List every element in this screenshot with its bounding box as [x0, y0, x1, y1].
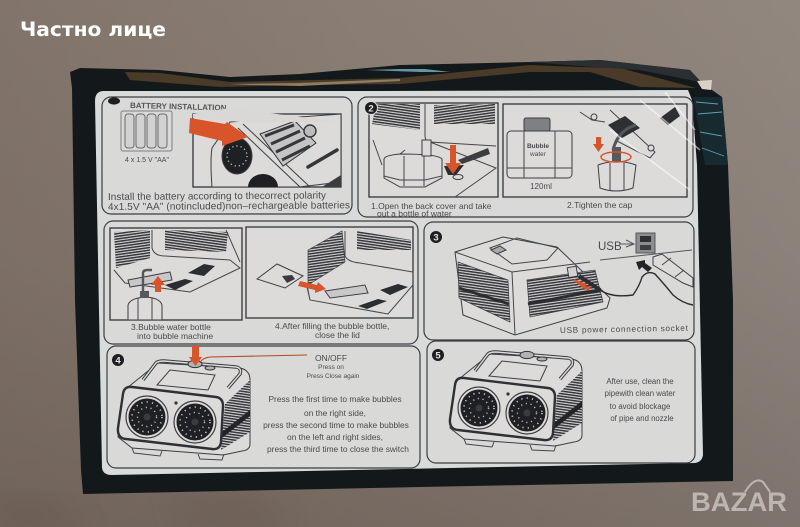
arrow: orange up: [151, 276, 165, 292]
panel 1: battery installation: [102, 97, 352, 214]
text: on/off instructions: press the second time to make bubbles: [263, 420, 409, 430]
label: USB socket: USB: [598, 241, 622, 253]
label: USB socket: [598, 233, 655, 253]
text: USB caption: USB power connection socket: [560, 324, 689, 335]
text: battery instructions: Install the battery according to thecorrect polarity: [108, 190, 326, 203]
text: step 1 caption: 1.Open the back cover and take: [371, 201, 492, 211]
text: step 1 caption: out a bottle of water: [377, 208, 452, 218]
text: step 4 caption: [275, 321, 389, 340]
illustration: battery compartment: [193, 108, 341, 187]
illustration: machine with USB cable: [455, 237, 693, 335]
text: step 4 caption: 4.After filling the bubble bottle,: [275, 321, 389, 331]
text: step 3 caption: [131, 322, 213, 341]
text: step 3 caption: into bubble machine: [137, 331, 213, 341]
icon: step number 5: 5: [435, 350, 441, 362]
illustration: tighten the cap: [580, 107, 680, 191]
text: cleaning instructions: of pipe and nozzle: [610, 414, 674, 423]
callout: orange line to on/off: [200, 355, 307, 363]
arrow: orange USB plug: [574, 279, 591, 291]
illustration: bubble water bottle: 120ml: [530, 182, 552, 191]
decorative plastic glare: [610, 92, 700, 190]
text: on/off label: [307, 353, 360, 380]
illustration: bubble water bottle: water: [529, 151, 547, 158]
illustration: USB plug: [653, 254, 693, 287]
illustration: bubble water bottle: Bubble: [527, 143, 549, 150]
text: on/off label: Press Close again: [307, 373, 360, 380]
illustration: bubble water bottle: [503, 104, 687, 197]
arrow: orange press down: [189, 346, 202, 366]
text: step 4 caption: close the lid: [315, 330, 360, 340]
icon: step number 1: [108, 97, 120, 105]
panel 5: on/off operation: [107, 346, 420, 468]
text: step 2 caption: 2.Tighten the cap: [567, 200, 633, 210]
teal plastic glare: [693, 97, 728, 165]
illustration: machine front: [118, 360, 250, 460]
torn brown flap: [125, 65, 696, 88]
illustration: machine front: [450, 351, 582, 451]
text: cleaning instructions: [605, 377, 676, 423]
text: step 3 caption: 3.Bubble water bottle: [131, 322, 211, 332]
panel 3: fitting the bottle: [104, 221, 418, 344]
icon: step number 4: [112, 354, 124, 366]
arrow: orange to lid: [298, 281, 326, 293]
icon: step number 3: [430, 231, 442, 244]
text: cleaning instructions: to avoid blockage: [610, 402, 670, 411]
icon: step number 4: 4: [115, 356, 121, 366]
arrow: orange down: [445, 145, 461, 174]
text: cleaning instructions: pipewith clean water: [605, 389, 676, 398]
text: on/off instructions: on the left and right sides,: [287, 432, 383, 442]
panel 2: bottle preparation: [358, 97, 693, 218]
illustration: open back cover: [369, 103, 498, 197]
instruction sheet: [95, 90, 703, 475]
text: on/off label: Press on: [318, 364, 344, 371]
label: battery spec: 4 x 1.5 V "AA": [125, 157, 169, 164]
illustration: closing the lid: [246, 227, 413, 318]
icon: step number 2: [364, 102, 378, 114]
icon: step number 3: 3: [433, 232, 439, 244]
text: on/off instructions: on the right side,: [304, 408, 366, 418]
icon: four AA batteries: [121, 111, 172, 151]
illustration: bottle into machine: [110, 228, 242, 320]
box: black packaging box: [70, 60, 733, 494]
text: step 1 caption: [371, 201, 492, 218]
text: on/off instructions: Press the first time to make bubbles: [268, 394, 402, 404]
text: on/off instructions: [263, 394, 409, 454]
text: on/off label: ON/OFF: [315, 353, 347, 363]
heading: battery installation: BATTERY INSTALLATION: [130, 101, 227, 113]
text: on/off instructions: press the third time to close the switch: [267, 444, 409, 454]
text: battery requirements: 4x1.5V "AA" (notincluded)non–rechargeable batteries: [108, 200, 350, 213]
text: cleaning instructions: After use, clean the: [606, 377, 674, 386]
icon: step number 2: 2: [368, 104, 374, 114]
watermark: seller label: Частно лице: [20, 18, 166, 41]
arrow: orange pointing to compartment: [189, 118, 248, 146]
watermark: logo: BAZAR: [691, 487, 787, 517]
panel 6: cleaning: [427, 341, 695, 463]
arrow: black insert arrow: [636, 260, 652, 272]
panel 4: USB power: [424, 222, 694, 340]
icon: step number 5: [432, 349, 444, 362]
